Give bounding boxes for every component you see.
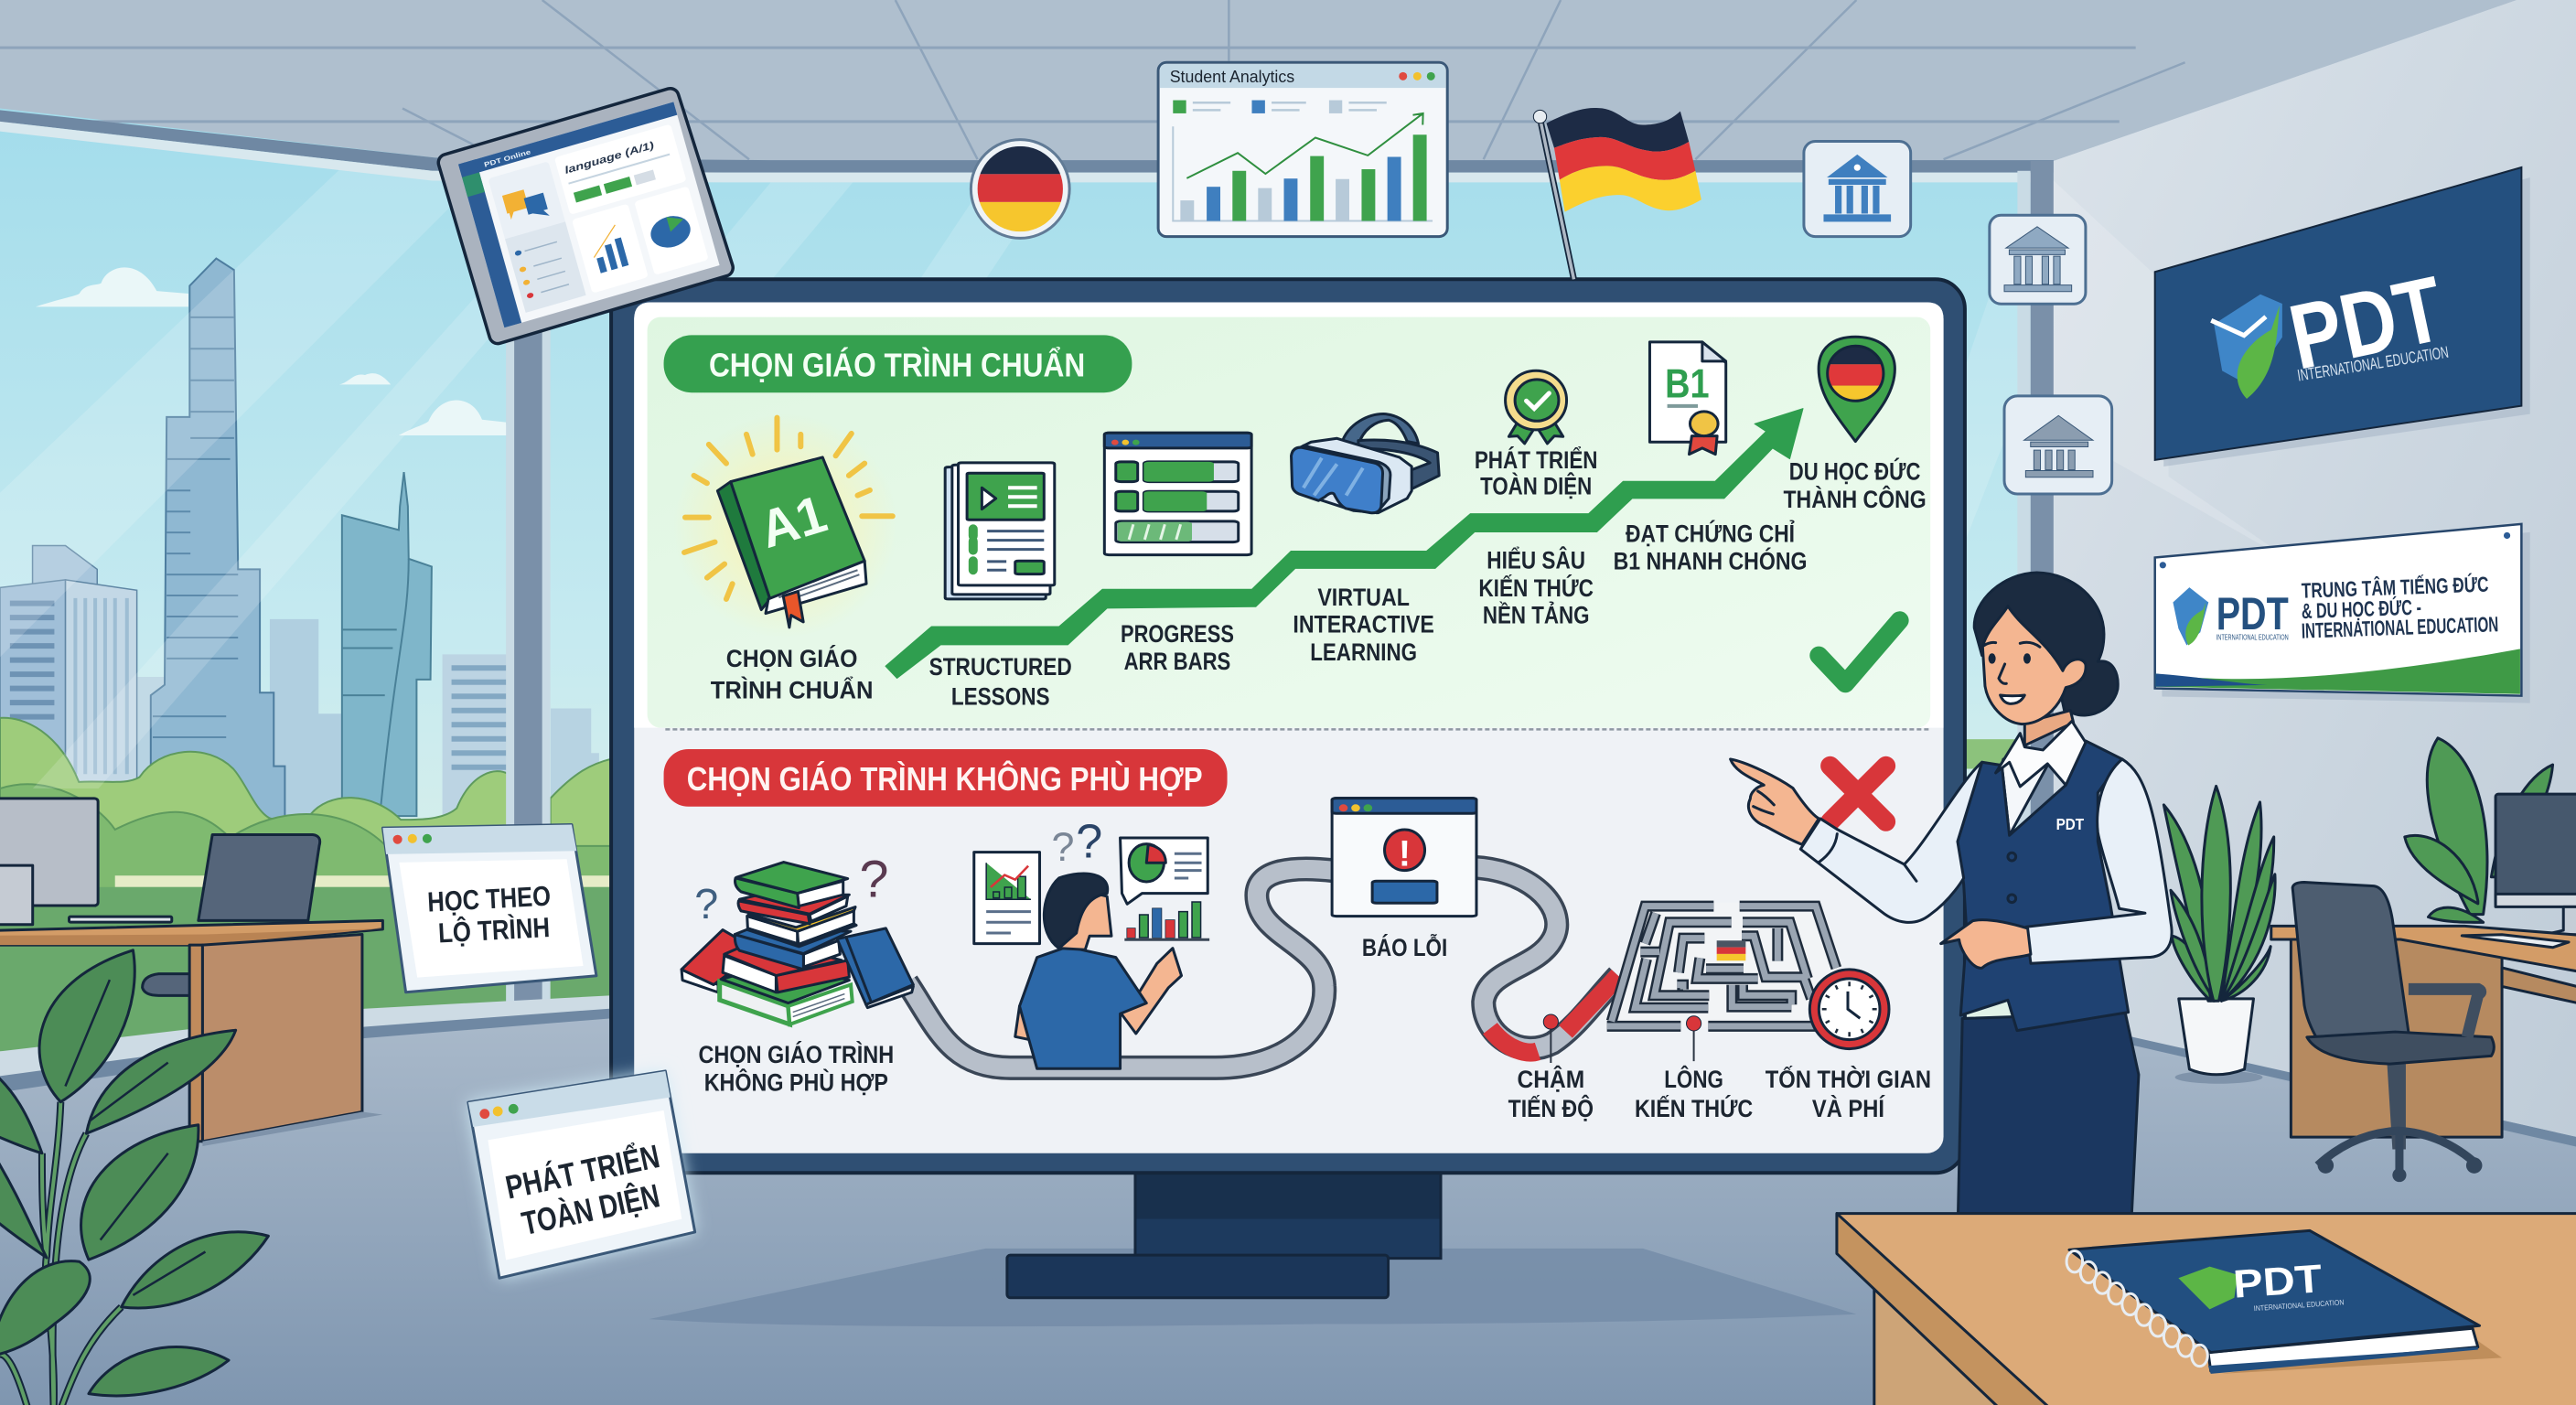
step labels: standard curriculum: LEARNING bbox=[1310, 638, 1417, 666]
icon: pile of books bbox=[682, 863, 913, 1024]
bar chart bbox=[1124, 902, 1209, 939]
icon: confused student bbox=[974, 838, 1209, 1068]
floor plant bbox=[2163, 786, 2275, 1084]
step labels: unsuitable curriculum: TỐN THỜI GIAN bbox=[1766, 1064, 1931, 1093]
desk side bbox=[202, 935, 362, 1142]
icon: structured lessons document bbox=[945, 463, 1055, 599]
floating card: comprehensive development: TOÀN DIỆN bbox=[519, 1176, 663, 1242]
step labels: unsuitable curriculum: TIẾN ĐỘ bbox=[1508, 1093, 1594, 1122]
blue book bbox=[735, 928, 851, 970]
A1 label: A1 bbox=[754, 485, 833, 560]
desk top bbox=[0, 920, 382, 945]
desk leg bbox=[189, 945, 202, 1142]
presenter woman bbox=[1731, 573, 2172, 1214]
step labels: unsuitable curriculum: BÁO LỖI bbox=[1362, 933, 1447, 961]
monitor frame bbox=[611, 279, 1965, 1173]
fallen red book bbox=[682, 930, 759, 992]
logo bbox=[2173, 587, 2208, 645]
vest buttons bbox=[2008, 853, 2016, 903]
spine bbox=[717, 482, 770, 610]
vest logo: PDT bbox=[2056, 815, 2084, 833]
grey winding road bbox=[907, 867, 1618, 1067]
notebook bbox=[2066, 1230, 2480, 1374]
step labels: standard curriculum: TRÌNH CHUẨN bbox=[711, 675, 874, 703]
floating card: comprehensive development: PHÁT TRIỂN bbox=[502, 1137, 662, 1207]
PDT wall sign: & DU HỌC ĐỨC - bbox=[2301, 595, 2421, 623]
icon: B1 certificate bbox=[1649, 342, 1726, 455]
foreground desk with notebook bbox=[1837, 1214, 2576, 1405]
step labels: standard curriculum: STRUCTURED bbox=[929, 653, 1072, 681]
step labels: unsuitable curriculum: LÔNG bbox=[1664, 1064, 1723, 1093]
question marks: ? bbox=[859, 851, 888, 909]
shirt front bbox=[2002, 759, 2047, 835]
step labels: standard curriculum: TOÀN DIỆN bbox=[1480, 472, 1592, 500]
step labels: standard curriculum: VIRTUAL bbox=[1317, 584, 1410, 611]
step labels: standard curriculum: KIẾN THỨC bbox=[1478, 574, 1594, 602]
right sleeve bbox=[2026, 759, 2172, 963]
exclamation mark: ! bbox=[1399, 833, 1411, 874]
report sheet bbox=[974, 853, 1040, 944]
step labels: unsuitable curriculum: VÀ PHÍ bbox=[1812, 1094, 1885, 1122]
window mullions bbox=[506, 161, 2054, 1090]
step labels: unsuitable curriculum bbox=[698, 933, 1931, 1122]
pages bbox=[766, 561, 866, 614]
step labels: standard curriculum: LESSONS bbox=[951, 682, 1050, 710]
bottom green book bbox=[720, 963, 853, 1024]
floating tablet bbox=[446, 97, 724, 335]
face bbox=[1982, 606, 2086, 724]
icon: green check mark bbox=[1819, 620, 1900, 683]
face details bbox=[1983, 642, 2040, 703]
monitor screen bbox=[634, 302, 1944, 1153]
floor bbox=[0, 995, 2576, 1405]
university icon card 3 bbox=[2004, 396, 2112, 494]
right wall bbox=[2054, 0, 2576, 1137]
student analytics card bbox=[1158, 62, 1447, 237]
panel: standard curriculum bbox=[648, 317, 1930, 728]
university icon card 1 bbox=[1804, 141, 1911, 237]
notebook logo: INTERNATIONAL EDUCATION bbox=[2254, 1298, 2345, 1313]
lower hand bbox=[1941, 920, 2031, 968]
visor bbox=[1292, 447, 1383, 513]
pointing hand bbox=[1731, 759, 1819, 844]
left office desk bbox=[0, 799, 382, 1146]
monitor shadow on floor bbox=[649, 1249, 1856, 1326]
torso bbox=[1020, 947, 1146, 1068]
PDT banner bbox=[2155, 167, 2530, 467]
heading pill: unsuitable curriculum: CHỌN GIÁO TRÌNH KHÔNG PHÙ HỢP bbox=[687, 760, 1203, 798]
back plant bbox=[2405, 738, 2553, 922]
face bbox=[1059, 885, 1111, 949]
collar bbox=[1996, 721, 2086, 787]
rays bbox=[684, 418, 893, 599]
bookmark bbox=[783, 592, 803, 627]
right monitor bbox=[2496, 794, 2576, 935]
step labels: unsuitable curriculum: CHỌN GIÁO TRÌNH bbox=[698, 1040, 894, 1068]
desk bbox=[2271, 926, 2576, 1137]
icon: glow behind book bbox=[673, 414, 897, 638]
monitor stand bbox=[1007, 1170, 1441, 1298]
icon: maze bbox=[1605, 903, 1839, 1027]
vest bbox=[1958, 741, 2129, 1031]
PDT banner: PDT bbox=[2281, 257, 2452, 390]
arms bbox=[1015, 1006, 1050, 1041]
step labels: standard curriculum: ĐẠT CHỨNG CHỈ bbox=[1626, 519, 1795, 548]
hair and bun bbox=[1974, 573, 2118, 715]
red book upper bbox=[738, 895, 849, 924]
rim bbox=[1304, 445, 1390, 513]
step labels: standard curriculum bbox=[711, 445, 1927, 710]
panel: standard curriculum background bbox=[634, 302, 1944, 728]
leaning blue book bbox=[837, 928, 913, 1008]
question marks: ? bbox=[1076, 815, 1102, 868]
PDT wall sign: INTERNATIONAL EDUCATION bbox=[2216, 634, 2289, 642]
icon: VR headset bbox=[1292, 414, 1439, 513]
notebook logo bbox=[2178, 1257, 2345, 1313]
heading pill: standard curriculum bbox=[664, 335, 1132, 392]
speech bubble pie bbox=[1121, 838, 1208, 904]
pointing sleeve bbox=[1800, 762, 1982, 922]
white yellow book bbox=[747, 907, 856, 947]
callout pins bbox=[1543, 1014, 1701, 1063]
step labels: standard curriculum: DU HỌC ĐỨC bbox=[1789, 456, 1920, 485]
step labels: standard curriculum: NỀN TẢNG bbox=[1483, 600, 1590, 629]
office chair bbox=[2292, 883, 2494, 1182]
skirt bbox=[1959, 1014, 2139, 1214]
question marks: ? bbox=[1051, 823, 1074, 870]
step labels: standard curriculum: ARR BARS bbox=[1124, 648, 1230, 675]
heading pill: standard curriculum: CHỌN GIÁO TRÌNH CHUẨN bbox=[709, 346, 1085, 383]
step labels: unsuitable curriculum: KIẾN THỨC bbox=[1635, 1094, 1753, 1122]
trees and lawn bbox=[0, 165, 611, 1051]
question marks: ? bbox=[694, 880, 718, 928]
logo bbox=[2211, 295, 2282, 399]
PDT wall sign: TRUNG TÂM TIẾNG ĐỨC bbox=[2301, 572, 2489, 603]
step labels: standard curriculum: INTERACTIVE bbox=[1293, 610, 1434, 638]
step labels: unsuitable curriculum: KHÔNG PHÙ HỢP bbox=[704, 1067, 888, 1096]
foreground plant bbox=[0, 950, 268, 1405]
window glass reflections bbox=[690, 181, 2029, 542]
monitor bbox=[0, 799, 98, 925]
student analytics card: Student Analytics bbox=[1170, 67, 1294, 86]
icon: medal bbox=[1506, 370, 1567, 444]
arrow: rising green staircase path bbox=[886, 409, 1803, 679]
notebook logo: PDT bbox=[2232, 1257, 2324, 1307]
step labels: standard curriculum: PHÁT TRIỂN bbox=[1475, 445, 1598, 474]
top green book bbox=[735, 863, 848, 908]
floating card: study roadmap: HỌC THEO bbox=[427, 881, 552, 918]
flag badge bbox=[971, 140, 1069, 238]
icon: error window bbox=[1332, 799, 1476, 917]
step labels: standard curriculum: B1 NHANH CHÓNG bbox=[1614, 546, 1808, 574]
floating tablet: language (A/1) bbox=[564, 139, 655, 176]
B1 label: B1 bbox=[1665, 360, 1710, 407]
cover bbox=[731, 457, 864, 599]
icon: red cross bbox=[1830, 766, 1886, 821]
desk front edge bbox=[0, 928, 382, 945]
step labels: unsuitable curriculum: CHẬM bbox=[1518, 1065, 1584, 1093]
strap bbox=[1342, 414, 1419, 445]
PDT wall sign bbox=[2155, 524, 2530, 703]
icon: progress bars window bbox=[1104, 433, 1251, 555]
step labels: standard curriculum: CHỌN GIÁO bbox=[726, 644, 857, 672]
hair bbox=[1044, 874, 1108, 949]
step labels: standard curriculum: HIỂU SÂU bbox=[1487, 545, 1585, 574]
city skyline through the window bbox=[0, 259, 599, 819]
neck bbox=[2024, 711, 2074, 745]
floating card: comprehensive development bbox=[468, 1071, 695, 1278]
floating card: study roadmap: LỘ TRÌNH bbox=[437, 910, 551, 949]
German flag on pole bbox=[1533, 108, 1701, 279]
floating tablet: PDT Online bbox=[483, 147, 531, 168]
step labels: standard curriculum: PROGRESS bbox=[1121, 620, 1234, 648]
PDT wall sign: PDT bbox=[2216, 587, 2289, 639]
right office: plants, desk, chair, monitor bbox=[2163, 738, 2576, 1182]
question marks bbox=[694, 815, 1102, 928]
icon: Germany location pin bbox=[1819, 337, 1894, 442]
red book bbox=[723, 939, 849, 992]
icon: clock bbox=[1809, 970, 1889, 1049]
chair bbox=[143, 834, 320, 995]
heading pill: unsuitable curriculum bbox=[664, 749, 1228, 807]
university icon card 2 bbox=[1990, 215, 2086, 304]
shell bbox=[1293, 438, 1411, 513]
keyboard bbox=[2462, 935, 2569, 948]
step labels: standard curriculum: THÀNH CÔNG bbox=[1783, 484, 1927, 513]
PDT banner: INTERNATIONAL EDUCATION bbox=[2296, 343, 2450, 385]
floating card: study roadmap bbox=[382, 825, 596, 992]
icon: A1 book bbox=[684, 418, 893, 627]
ceiling bbox=[0, 0, 2517, 182]
keyboard bbox=[70, 917, 172, 922]
